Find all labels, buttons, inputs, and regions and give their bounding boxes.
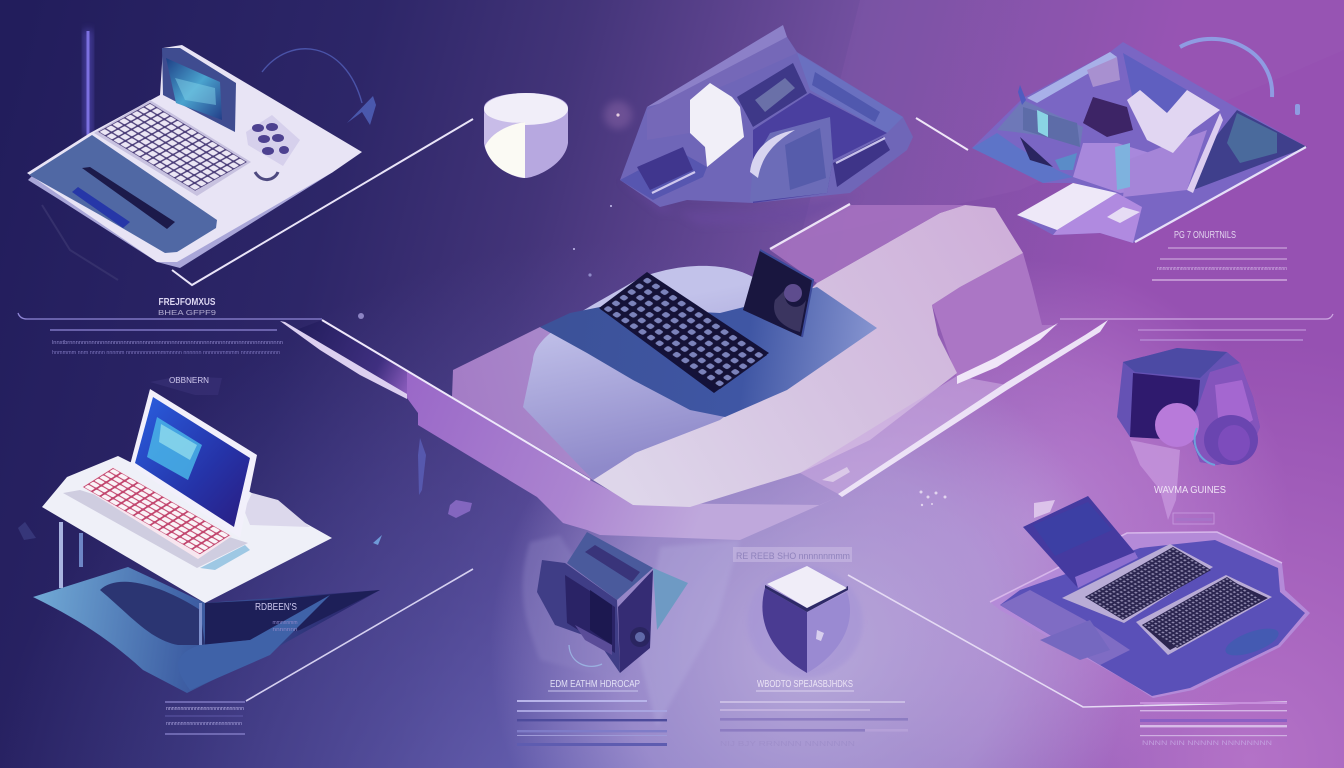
glow star: [573, 101, 632, 277]
lavender platform left face: [452, 327, 640, 480]
dark interior: [1130, 373, 1200, 440]
caption: BHEA GFPF9: [158, 308, 216, 317]
fin sheet: [653, 568, 688, 630]
particles: [373, 438, 472, 545]
right rail sheet: [800, 376, 1007, 495]
panel: central keyboard platform: [280, 205, 1108, 540]
keyboard: red keys: [82, 467, 232, 559]
blue mat: [540, 287, 877, 417]
separator and text rows: lnnxtbrnnnnnnnnnnnnnnnnnnnnnnnnnnnnnnnnnnnnnnnnnnnnnnnnnnnnnnnnnnnnnnnnnnn: [52, 340, 283, 346]
text rows: nnnnnnnnnnnnnnnnnnnnnnnnnnn: [166, 706, 244, 712]
panel: bottom-right twin keyboards: [990, 496, 1310, 747]
top layers: [567, 532, 653, 600]
dark floor: [753, 93, 887, 203]
side fragment: [18, 522, 36, 540]
caption above: OBBNERN: [169, 376, 209, 385]
caption on fabric: RDBEEN'S: [255, 602, 297, 613]
top strip: [647, 25, 787, 107]
blue slate area: [29, 135, 217, 253]
shadow strut: [42, 205, 118, 280]
outer pointers: [916, 118, 968, 150]
caption: WBODTO SPEJASBJHDKS: [757, 679, 853, 690]
inner opening: [565, 575, 615, 653]
strip label: [733, 547, 852, 562]
tray glass: [1073, 143, 1187, 193]
text rows: [517, 700, 667, 746]
light cone: [1130, 440, 1180, 520]
small box: [1173, 513, 1214, 524]
caption on fabric: nnnnnnn: [272, 627, 298, 633]
panel: top-right device: [972, 39, 1333, 319]
dark right box: [833, 137, 890, 187]
dark centre: [1083, 97, 1133, 137]
pointer line: [848, 575, 1287, 707]
white table: [42, 456, 332, 603]
text rows: NNNN NIN NNNNN NNNNNNNN: [1142, 741, 1272, 747]
upper glass: [647, 37, 797, 140]
lower tapered rail: [280, 321, 407, 399]
front frame: [537, 560, 620, 673]
pale crescent: [750, 130, 795, 178]
caption on fabric: mmnnnmm: [272, 620, 298, 626]
caption: [158, 297, 216, 317]
tray rim: [990, 532, 1282, 602]
cube top: [765, 585, 848, 612]
top strip: [1138, 330, 1306, 340]
tablet stand: [743, 250, 813, 337]
screen: [1023, 496, 1138, 588]
keyboard: pale keys: [94, 100, 251, 196]
white tray: [1017, 183, 1117, 230]
keyboard one: [1062, 544, 1213, 623]
blue base left: [972, 133, 1073, 183]
small arrow mark: [347, 96, 376, 125]
caption: WAVMA GUINES: [1154, 485, 1226, 496]
lens: [630, 627, 650, 647]
caption: EDM EATHM HDROCAP: [550, 679, 640, 690]
blue fabric: [33, 567, 380, 693]
text rows: NIJ BJY RRNNNN NNNNNNN: [720, 741, 855, 748]
arc: [262, 49, 362, 103]
diagonal highlight: [1187, 113, 1223, 193]
halo circle: [747, 566, 863, 678]
dark sub panel: [737, 63, 807, 127]
cube body: [762, 588, 807, 673]
long bracket line: [172, 119, 473, 285]
dark slot: [82, 167, 175, 229]
keyboard: dark black keys: [599, 272, 769, 393]
left tray: [620, 150, 707, 200]
small bar: [1295, 104, 1300, 115]
caption: FREJFOMXUS: [158, 297, 216, 308]
right rail two: [838, 320, 1108, 497]
blue grey blob: [523, 266, 800, 480]
right wall: [797, 53, 903, 133]
back strip: [1027, 52, 1117, 103]
white leaf: [690, 83, 744, 167]
dark rail strip: [296, 320, 407, 398]
panel: bottom-left laptop: [18, 376, 473, 734]
trackpad glow: [200, 545, 250, 570]
caption: PG 7 ONURTNILS: [1174, 230, 1236, 241]
glass shell: [620, 27, 913, 207]
panel: bottom centre projector: [517, 532, 688, 746]
text rows: [1152, 248, 1287, 280]
particle: [358, 313, 364, 319]
halo: [523, 535, 632, 680]
legs: [59, 522, 202, 645]
separator and text rows: hnmmmm nnm nnnnn nnnmm nnnnnnnnnnmmmnnnn nnnnnn nnnnnnmmmm nnnnnnnnnnnnn: [52, 350, 280, 356]
purple band of platform: [407, 370, 840, 540]
soft shadow: [620, 180, 860, 225]
cyan column: [1115, 143, 1130, 190]
device underside: [28, 150, 333, 268]
panel: bottom centre cube: [720, 547, 1287, 748]
text rows: nnnnnnnmnnnnnnnnnnnnnnnnnnnnnnnnnnnnnnnnnnnnnn: [1157, 266, 1287, 272]
bright front edge: [1135, 147, 1306, 242]
blue slot: [72, 187, 130, 228]
text rows: [165, 702, 245, 734]
caption above: [150, 376, 222, 395]
icon: white cylinder: [484, 93, 568, 178]
dark right wedge: [1193, 110, 1307, 190]
screen: [162, 48, 236, 132]
lower glass: [750, 117, 833, 202]
bracket line: [246, 569, 473, 701]
disc: [1155, 403, 1199, 447]
blue glow item: [1222, 623, 1282, 661]
cable: [569, 645, 602, 666]
base plate: [972, 42, 1307, 243]
text rows: nnnnnnnnnnnnnnnnnnnnnnnnnn: [166, 721, 242, 727]
outer shell: [1117, 348, 1260, 465]
fabric inner dark: [100, 582, 205, 645]
upper edge panel: [770, 205, 965, 283]
laptop screen: [130, 389, 257, 538]
separator and text rows: [18, 313, 322, 356]
arc: [1180, 39, 1272, 97]
tray dark floor: [1000, 540, 1305, 696]
pale lump: [1127, 90, 1220, 153]
separator: [1060, 314, 1333, 319]
caption on fabric: [255, 602, 298, 633]
left machine: [997, 100, 1083, 147]
right rail one: [957, 323, 1058, 384]
sparkle dots on platform: [920, 490, 946, 506]
text rows: [1140, 702, 1287, 747]
small side keypad: [246, 115, 300, 180]
ear cup: [1204, 415, 1258, 465]
keyboard tray: [63, 490, 248, 568]
right shoulder of platform: [932, 253, 1058, 378]
keyboard two: [1136, 575, 1272, 655]
pale platform surface: [593, 205, 1023, 507]
lower piece: [1053, 193, 1142, 243]
side column: [618, 570, 653, 673]
panel: headset: [1117, 330, 1306, 524]
glowing vertical bar: [84, 30, 92, 136]
white device top: [27, 45, 362, 262]
strip label: RE REEB SHO nnnnnnmmm: [736, 551, 850, 561]
tray shell: [990, 532, 1310, 698]
upper rail line: [322, 320, 590, 480]
panel: top centre device: [620, 25, 968, 249]
panel: top-left keyboard device: [18, 30, 473, 356]
